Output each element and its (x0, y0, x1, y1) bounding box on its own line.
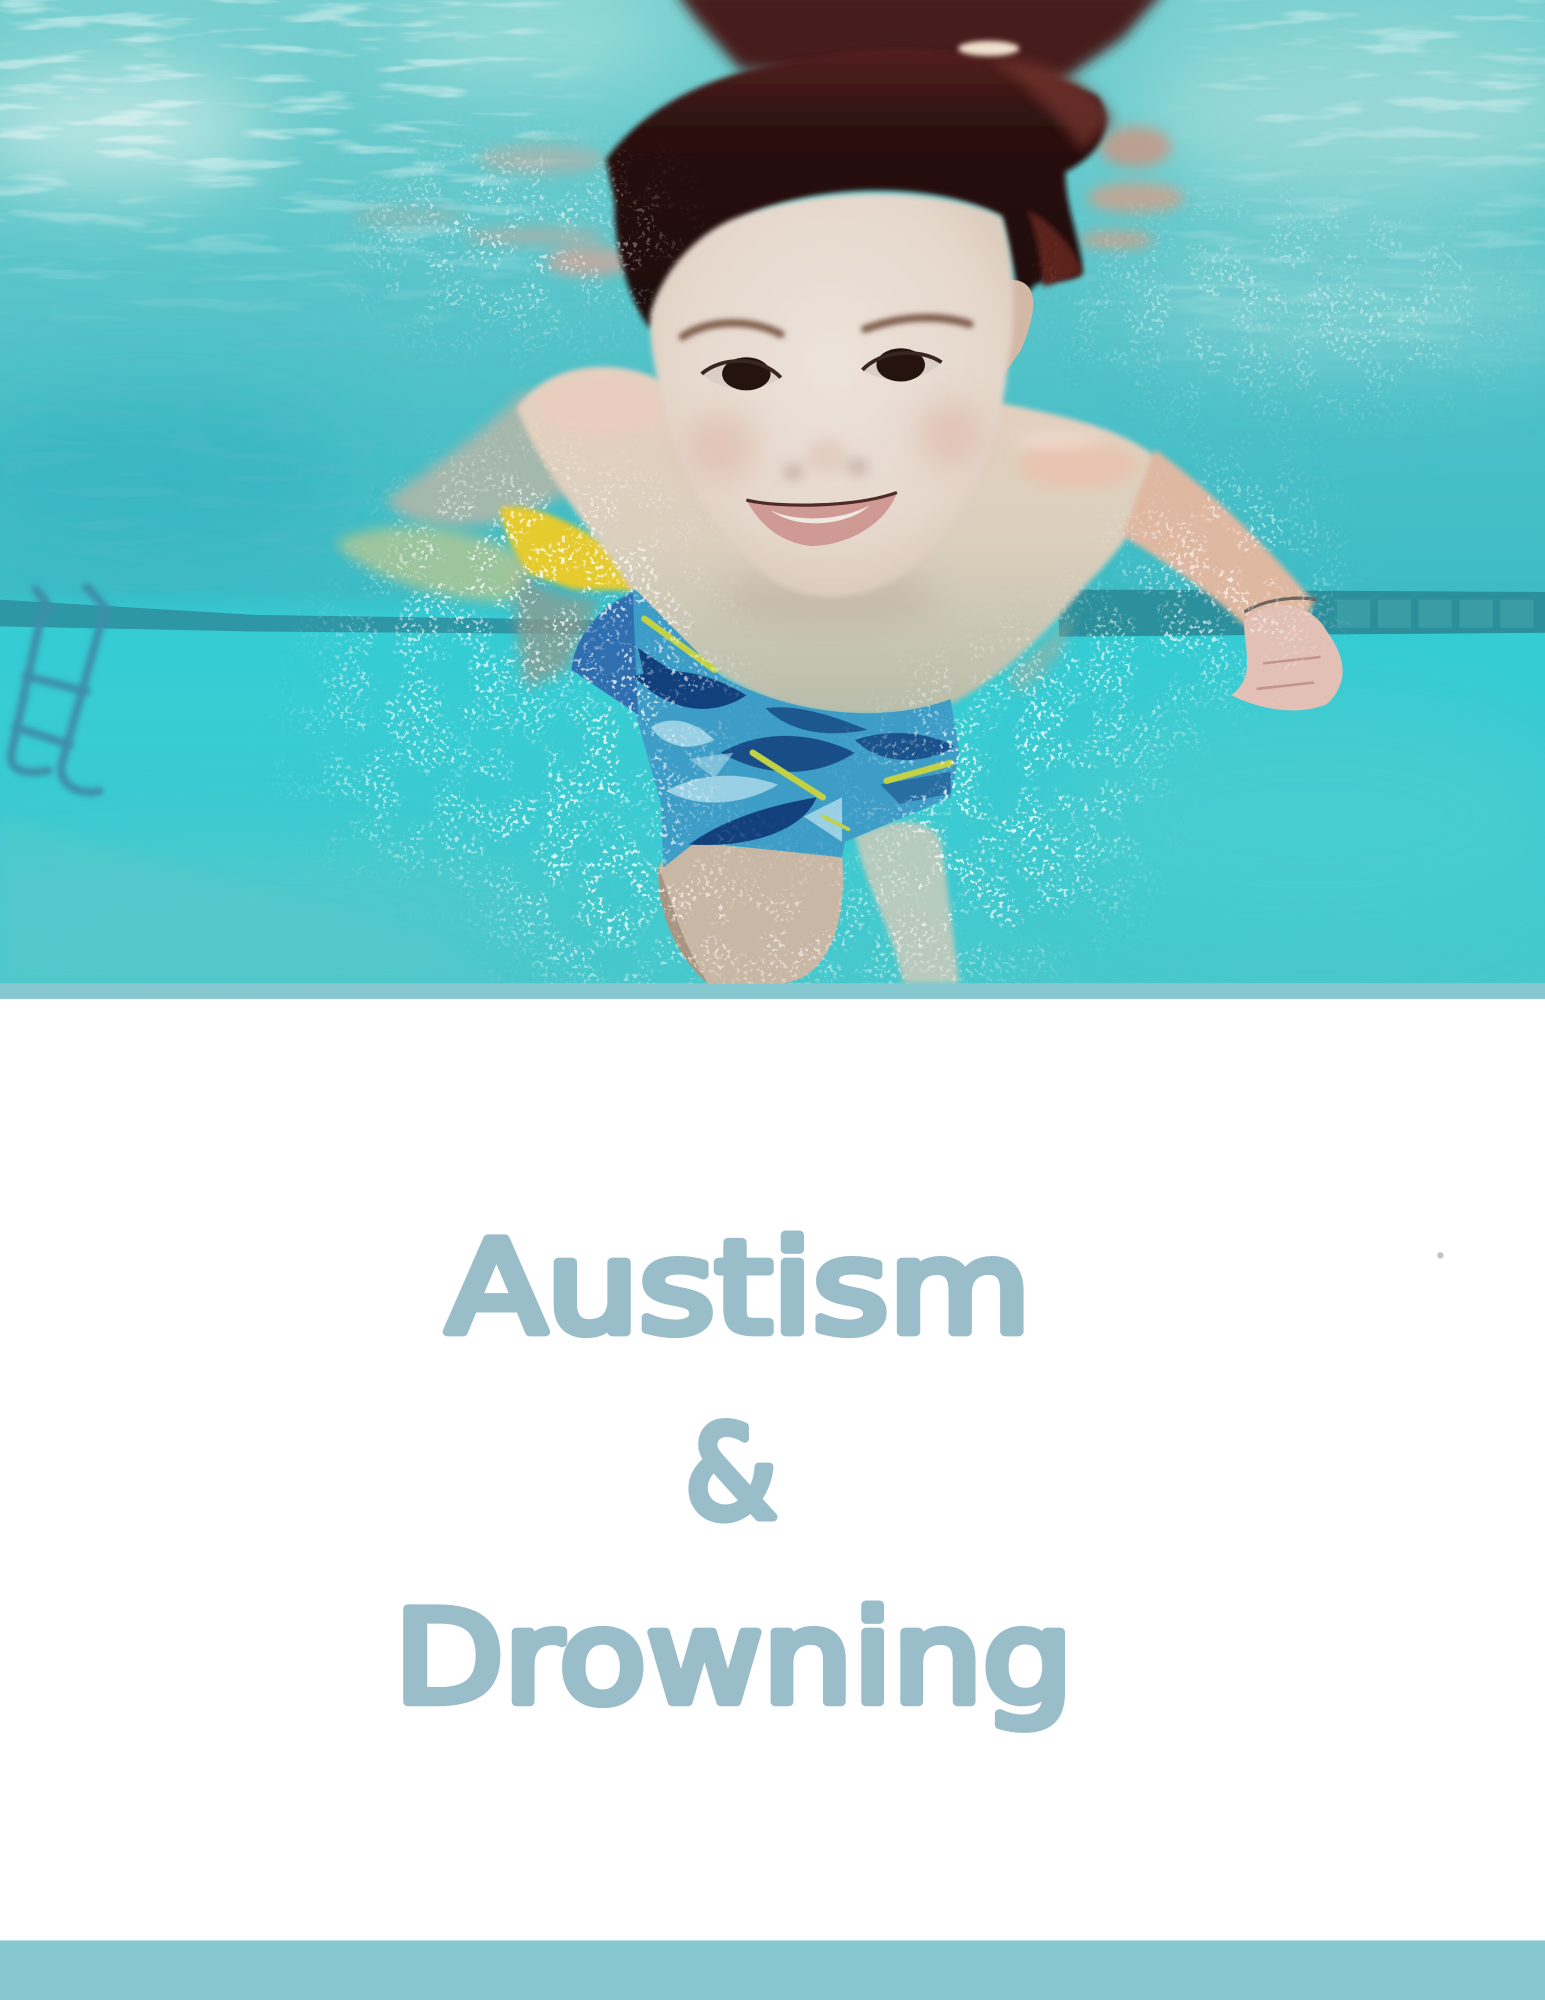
nose (783, 439, 868, 480)
eyebrows (683, 318, 970, 337)
legs (658, 822, 959, 984)
eyes (702, 348, 942, 390)
chin shadow on chest (740, 581, 920, 622)
title line: Austism: Austism (447, 1215, 1031, 1363)
shadow ripples (1396, 285, 1416, 286)
title line: Drowning: Drowning (394, 1585, 1073, 1733)
neck and ear shadow (998, 280, 1033, 383)
shoulder highlights (1022, 436, 1134, 486)
swim shorts (572, 589, 959, 868)
small stray dot (1437, 1252, 1444, 1259)
top teal divider band (0, 984, 1545, 999)
pink reflections on the surface (351, 126, 1184, 277)
surface glare and reflections (0, 0, 1545, 970)
near arm and hand (1123, 449, 1343, 710)
floor shadow (4, 825, 110, 872)
far arm and far leg (385, 389, 1074, 695)
photo: child swimming underwater (0, 0, 1545, 984)
title line: ampersand: & (685, 1400, 777, 1548)
pool water background (0, 0, 1545, 984)
bottom teal band (0, 1940, 1545, 2000)
yellow float (334, 507, 653, 602)
title (394, 1215, 1073, 1733)
face (650, 194, 1014, 597)
pool wall tile line (0, 589, 1545, 637)
cheek colour (685, 401, 984, 480)
smile (746, 492, 897, 546)
water ripples (0, 0, 1545, 339)
rising air bubbles (0, 0, 1545, 984)
pool ladder (11, 587, 107, 792)
hair (606, 0, 1167, 329)
torso (517, 367, 1158, 715)
